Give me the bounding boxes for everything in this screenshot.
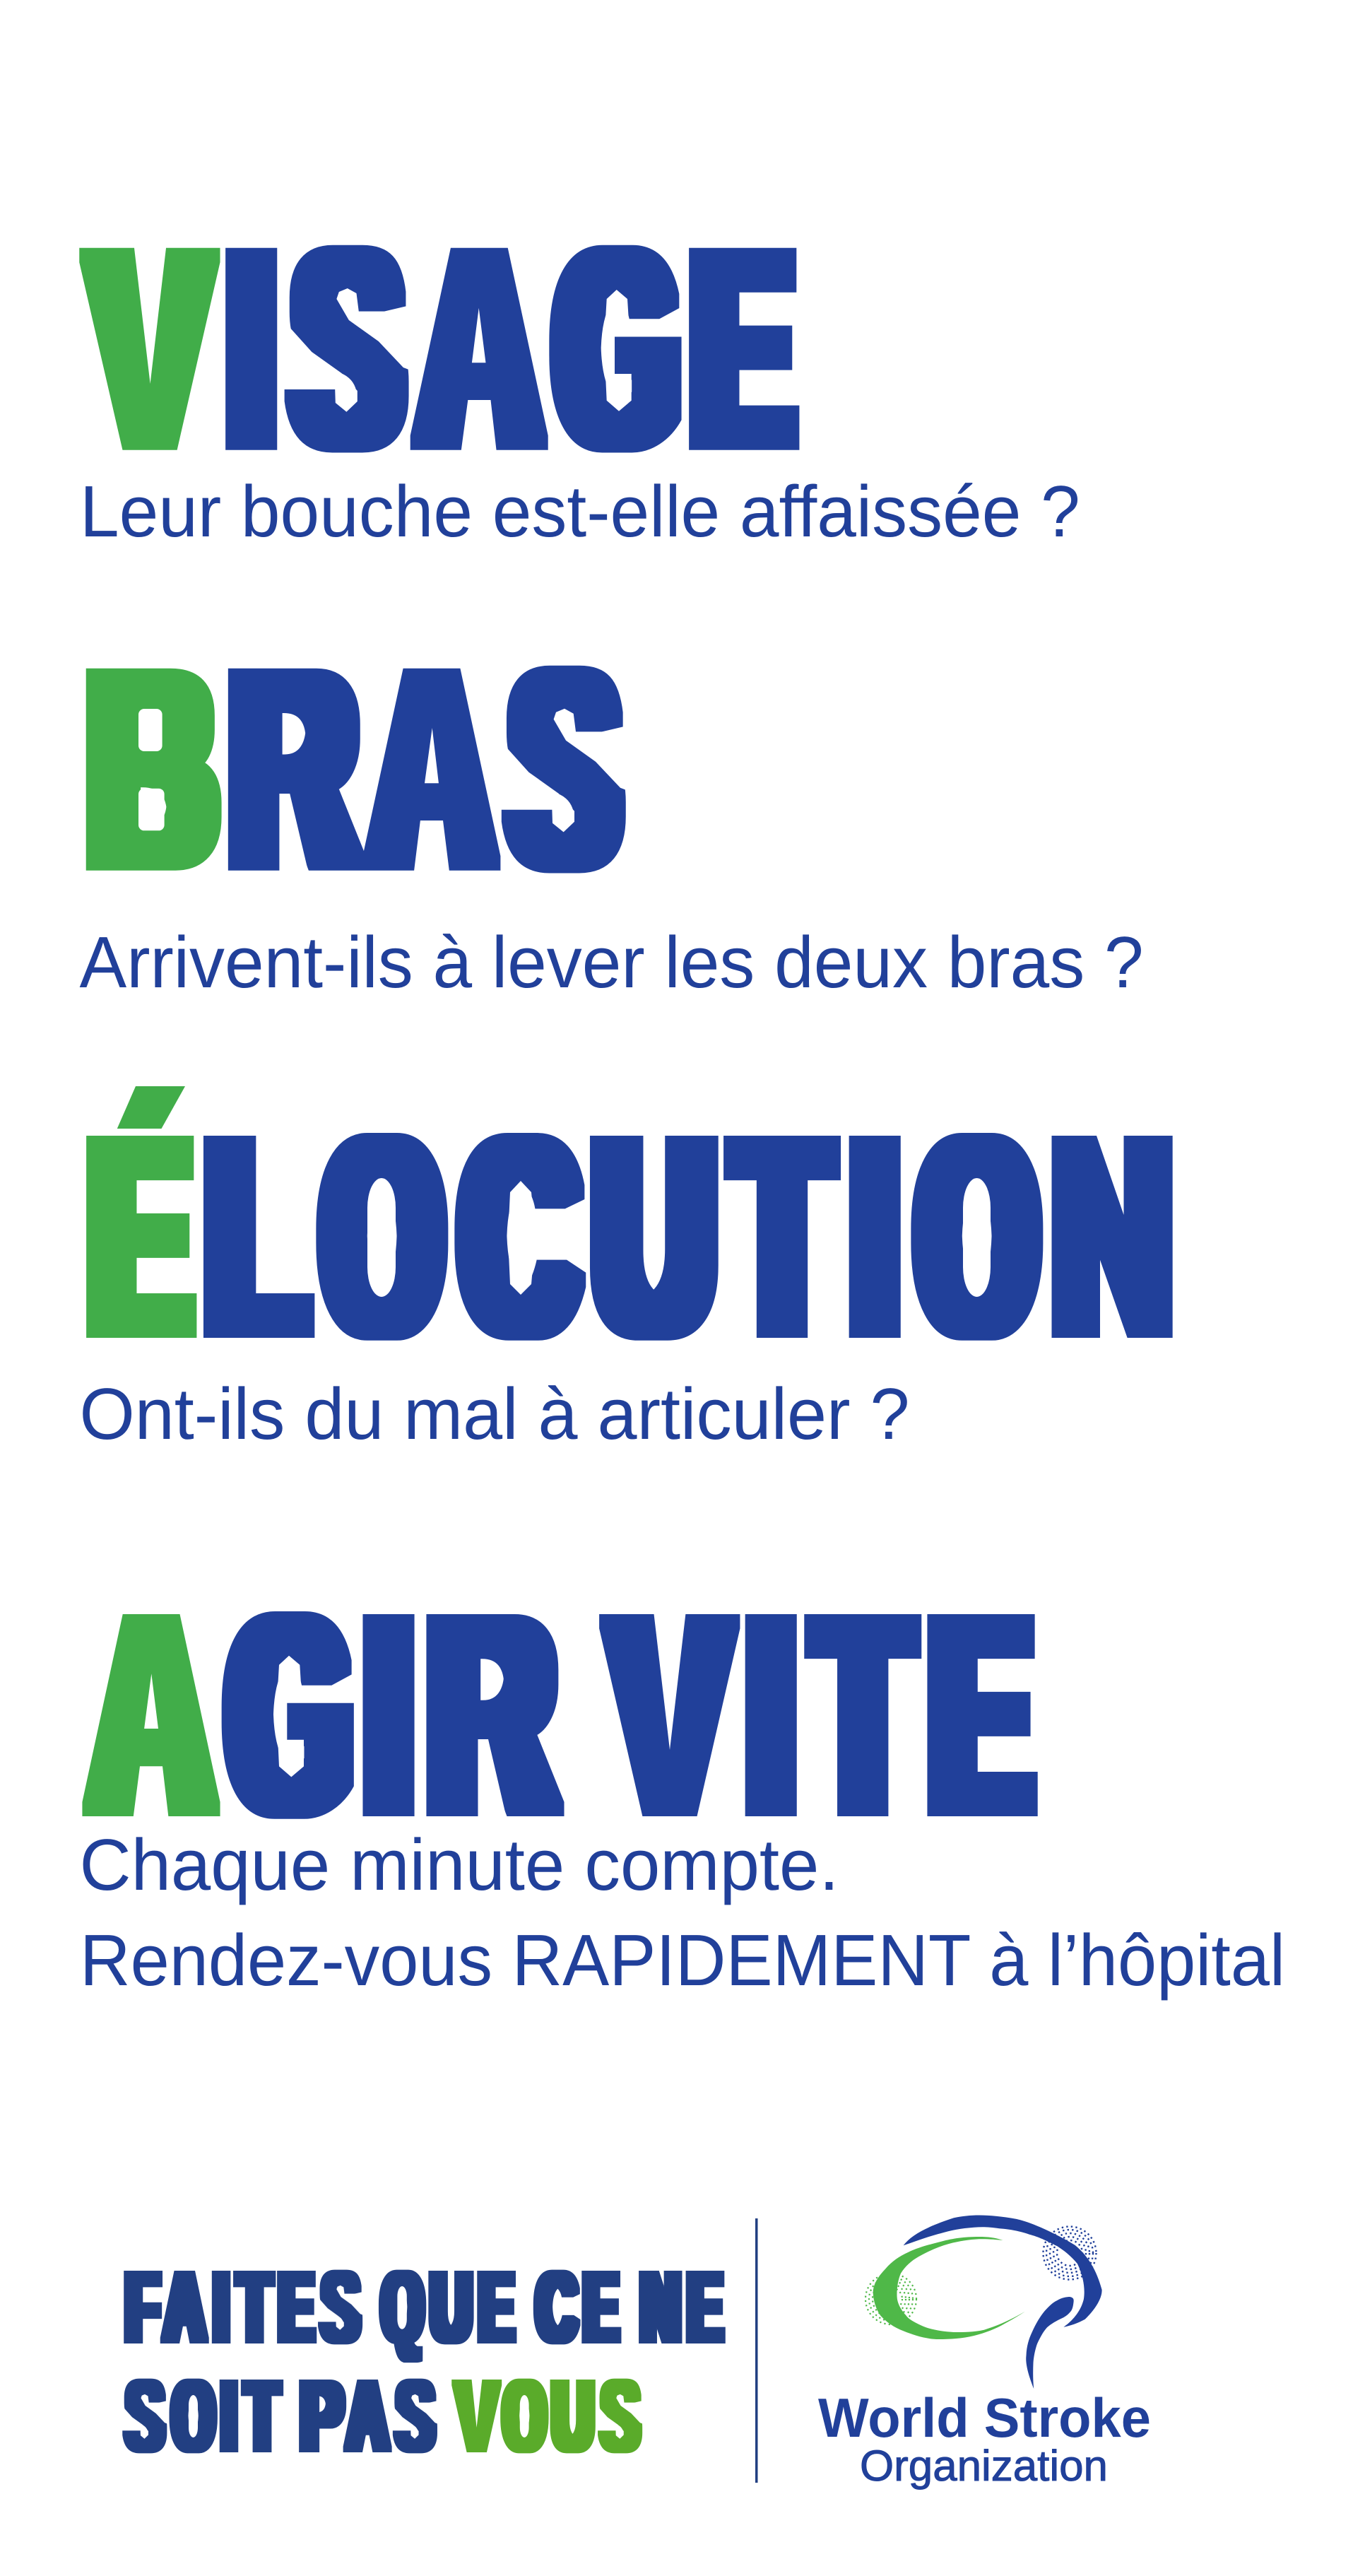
footer slogan: E [584,2252,618,2361]
heading: VISAGE: S [295,196,400,501]
footer slogan: E [479,2252,513,2361]
footer slogan: N [641,2252,680,2361]
footer slogan: U [552,2361,593,2470]
footer slogan: A [165,2252,205,2361]
heading: ÉLOCUTION [85,1071,1168,1389]
heading: AGIR VITE: V [613,1562,727,1867]
panel: bras [79,616,1144,1004]
heading: VISAGE: A [421,196,538,501]
heading: ÉLOCUTION: C [463,1083,575,1389]
heading: AGIR VITE: R [430,1562,553,1867]
heading: BRAS [89,616,633,922]
heading: ÉLOCUTION: É [92,1083,187,1389]
heading: AGIR VITE: I [750,1562,792,1867]
text: Organization: Organization [860,2442,1108,2490]
footer slogan: E [688,2252,722,2361]
text: go to hospital: Rendez-vous RAPIDEMENT à l’hôpital [80,1919,1285,2001]
footer slogan: S [322,2252,359,2361]
text: visage question: Leur bouche est-elle affaissée ? [80,471,1080,553]
footer slogan: Q [382,2252,422,2361]
text: every minute counts: Chaque minute compte. [79,1824,839,1906]
footer slogan: T [238,2252,271,2361]
heading: AGIR VITE: E [933,1562,1029,1867]
footer slogan [122,2252,722,2470]
footer slogan: O [504,2361,545,2470]
footer slogan: I [214,2252,228,2361]
footer slogan: U [431,2252,471,2361]
footer slogan: I [222,2361,236,2470]
heading: VISAGE [93,196,790,501]
heading: BRAS: S [512,616,618,922]
heading: AGIR VITE: T [817,1562,909,1867]
footer slogan: C [537,2252,577,2361]
text: elocution question: Ont-ils du mal à articuler ? [79,1373,910,1455]
footer slogan: E [279,2252,313,2361]
heading: AGIR VITE: A [93,1562,210,1867]
panel: agir vite [79,1562,1285,2001]
footer slogan: T [246,2361,278,2470]
panel: visage [80,196,1080,553]
footer slogan: S [126,2361,163,2470]
footer slogan: O [172,2361,214,2470]
heading: ÉLOCUTION: T [737,1083,827,1389]
footer slogan: S [602,2361,639,2470]
heading: ÉLOCUTION: N [1056,1083,1168,1389]
heading: ÉLOCUTION: O [325,1083,439,1389]
footer slogan: A [348,2361,388,2470]
heading: VISAGE: G [558,196,676,501]
heading: ÉLOCUTION: I [853,1083,896,1389]
heading: BRAS: B [89,616,215,922]
footer slogan: V [457,2361,497,2470]
logo: World Stroke Organization [818,2216,1151,2490]
heading: ÉLOCUTION: O [920,1083,1034,1389]
heading: ÉLOCUTION: L [208,1083,305,1389]
panel: elocution [79,1071,1168,1455]
heading: VISAGE: E [694,196,790,501]
heading: AGIR VITE: G [230,1562,348,1867]
icon: brain swoosh mark [865,2216,1102,2389]
heading: AGIR VITE: I [367,1562,410,1867]
footer slogan: F [126,2252,159,2361]
footer slogan: S [397,2361,434,2470]
heading: BRAS: R [232,616,355,922]
text: bras question: Arrivent-ils à lever les deux bras ? [79,922,1144,1004]
footer slogan: P [300,2361,343,2470]
text: World Stroke: World Stroke [818,2387,1151,2449]
heading: VISAGE: I [230,196,273,501]
heading: AGIR VITE [93,1562,1029,1867]
heading: ÉLOCUTION: U [595,1083,714,1389]
heading: BRAS: A [374,616,490,922]
heading: VISAGE: V [93,196,207,501]
